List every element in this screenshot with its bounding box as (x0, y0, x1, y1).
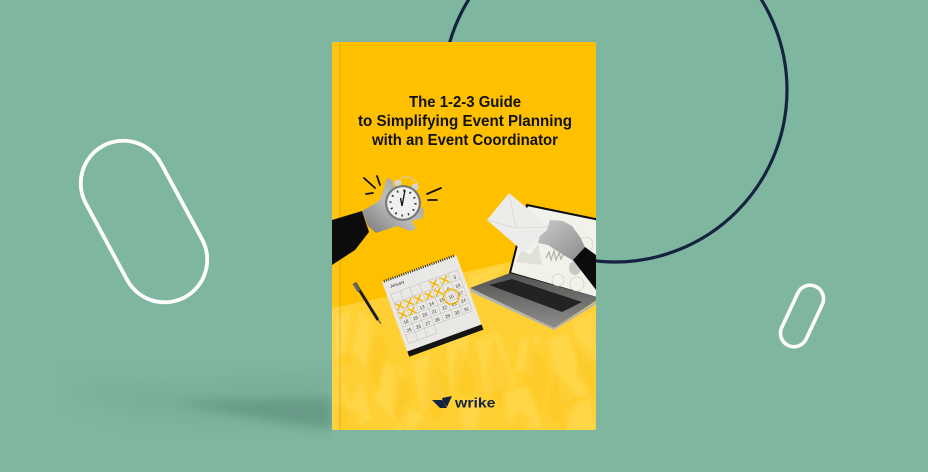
icon: hand with envelope (487, 193, 600, 295)
book cover (332, 42, 600, 430)
calendar page (382, 255, 482, 352)
hand (538, 220, 585, 261)
envelope (487, 193, 528, 253)
dates: 14 (428, 301, 435, 307)
cover illustration scene (78, 0, 826, 431)
title: to Simplifying Event Planning (358, 113, 572, 130)
icon: pen (354, 283, 381, 324)
dates: 25 (406, 327, 413, 333)
dates: 24 (460, 297, 467, 304)
envelope flap (487, 193, 550, 228)
dates: 27 (425, 320, 432, 327)
screen charts (516, 237, 593, 291)
dates: 18 (403, 318, 410, 325)
dates: 30 (454, 309, 461, 316)
black sleeve (573, 247, 596, 290)
palm and fingers (362, 178, 424, 233)
title: with an Event Coordinator (371, 132, 558, 149)
clock face (387, 187, 419, 219)
dates: 3 (453, 274, 457, 280)
yellow cover base (332, 42, 596, 430)
dates: 21 (431, 308, 438, 315)
dates: 13 (419, 304, 426, 311)
laptop (470, 205, 600, 330)
dates: 19 (412, 315, 419, 321)
dates: 16 (448, 293, 455, 300)
month label: January (389, 279, 406, 289)
dates: 31 (463, 306, 470, 312)
dates (404, 276, 469, 332)
small white pill outline (776, 281, 828, 351)
logo wordmark: wrike (454, 394, 496, 410)
large white pill outline (66, 126, 222, 317)
calendar base (407, 325, 483, 357)
spiral binding (384, 256, 454, 281)
laptop base (470, 273, 600, 328)
dates: 20 (422, 311, 428, 318)
laptop screen (510, 205, 600, 299)
circled date (442, 288, 460, 305)
logo mark (432, 396, 452, 408)
yellow cross-outs (395, 275, 460, 320)
clock body (385, 185, 421, 221)
calendar (382, 255, 483, 357)
book shadow (172, 390, 332, 431)
dates: 17 (457, 290, 464, 297)
dates: 26 (415, 323, 422, 330)
wrike logo (432, 396, 495, 408)
title (358, 96, 571, 145)
crumpled paper (332, 262, 596, 430)
black sleeve (332, 211, 369, 265)
dates: 10 (455, 282, 462, 289)
icon: hand holding alarm clock (332, 176, 441, 265)
dates: 28 (434, 317, 441, 323)
clock bells (394, 180, 402, 186)
clock bow (400, 177, 418, 184)
title: The 1-2-3 Guide (409, 94, 521, 111)
motion ticks (364, 176, 441, 200)
keyboard (489, 279, 582, 312)
spine crease (332, 42, 340, 430)
navy circle outline (443, 0, 787, 262)
dates: 9 (446, 286, 451, 292)
dates: 23 (451, 301, 458, 307)
clock numerals (390, 190, 416, 216)
grid lines (391, 270, 475, 344)
dates: 29 (444, 313, 451, 319)
clock hands (402, 190, 405, 206)
dates: 22 (441, 304, 448, 311)
dates: 15 (439, 297, 445, 303)
